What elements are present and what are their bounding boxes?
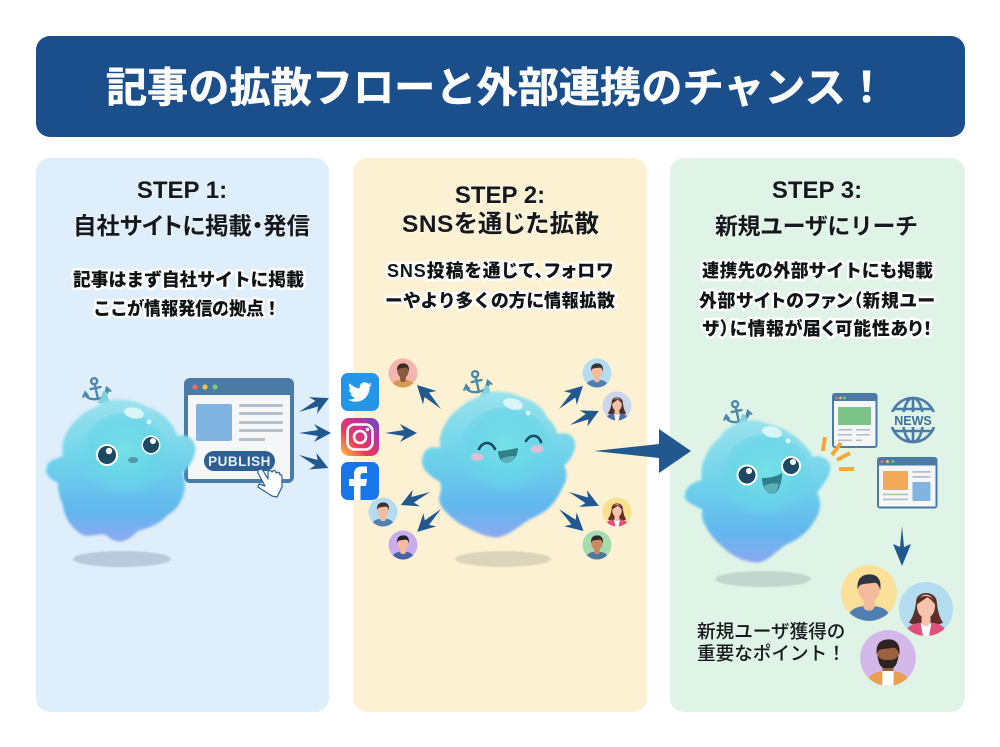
caption: 重要なポイント！ [697,643,846,664]
step 2 heading: STEP 2: [455,182,545,209]
panel: step 2 [353,158,647,712]
arrows: publish to social [295,390,333,476]
step 3 body text: 外部サイトのファン（新規ユー [699,290,935,311]
avatar: right woman [603,392,631,422]
caption: 新規ユーザ獲得の [697,621,845,642]
step 1 heading [73,177,310,239]
avatar: lower right woman [603,498,631,528]
step 2 body text [385,260,615,311]
icon: facebook [341,462,379,500]
avatar: top right [583,359,611,389]
browser window: site [877,457,938,508]
mascot: publishing [49,375,193,539]
icon: cursor hand [258,469,282,497]
big arrow: step 2 to step 3 [594,429,691,473]
step 1 body text [73,269,304,319]
mascot: happy [424,368,573,535]
step 1 body text: ここが情報発信の拠点！ [93,298,281,319]
title: 記事の拡散フローと外部連携のチャンス！ [106,65,887,111]
step 2 heading: SNSを通じた拡散 [402,210,599,238]
panel: step 3 [670,158,965,712]
arrows: to followers [385,378,603,539]
avatar: new user woman [899,582,953,640]
avatar: bottom right [583,531,611,561]
arrow: down to new users [893,526,911,566]
step 3 heading [715,177,918,239]
mascot: excited [687,398,828,560]
shadow [455,551,551,567]
title banner [36,36,965,137]
publish button: PUBLISH [208,454,271,469]
icon: twitter [341,373,379,411]
avatar: bottom left [389,531,417,561]
avatar: new user bearded man [860,630,916,690]
step 3 heading: STEP 3: [772,177,862,204]
avatar: lower left [369,498,397,528]
icon: news globe [888,398,938,442]
browser window: article [832,393,878,448]
caption [697,621,846,664]
step 1 heading: STEP 1: [137,177,227,204]
step 2 heading [402,182,599,238]
step 3 body text: ザ）に情報が届く可能性あり！ [702,318,932,339]
browser window: publish [184,378,294,497]
panel: step 1 [36,158,329,712]
step 2 body text: ーやより多くの方に情報拡散 [385,290,615,311]
shadow [73,551,171,567]
step 1 heading: 自社サイトに掲載・発信 [73,213,310,239]
step 2 body text: SNS投稿を通じて、フォロワ [387,260,613,281]
step 1 body text: 記事はまず自社サイトに掲載 [73,269,304,290]
icon: instagram [341,418,379,456]
avatar: top left [389,359,417,389]
step 3 heading: 新規ユーザにリーチ [715,213,918,239]
icon: sparks [823,437,854,469]
step 3 body text [699,260,935,339]
icon: news globe: NEWS [894,414,932,428]
avatar: new user man [841,565,897,625]
shadow [715,571,811,587]
step 3 body text: 連携先の外部サイトにも掲載 [702,260,933,281]
